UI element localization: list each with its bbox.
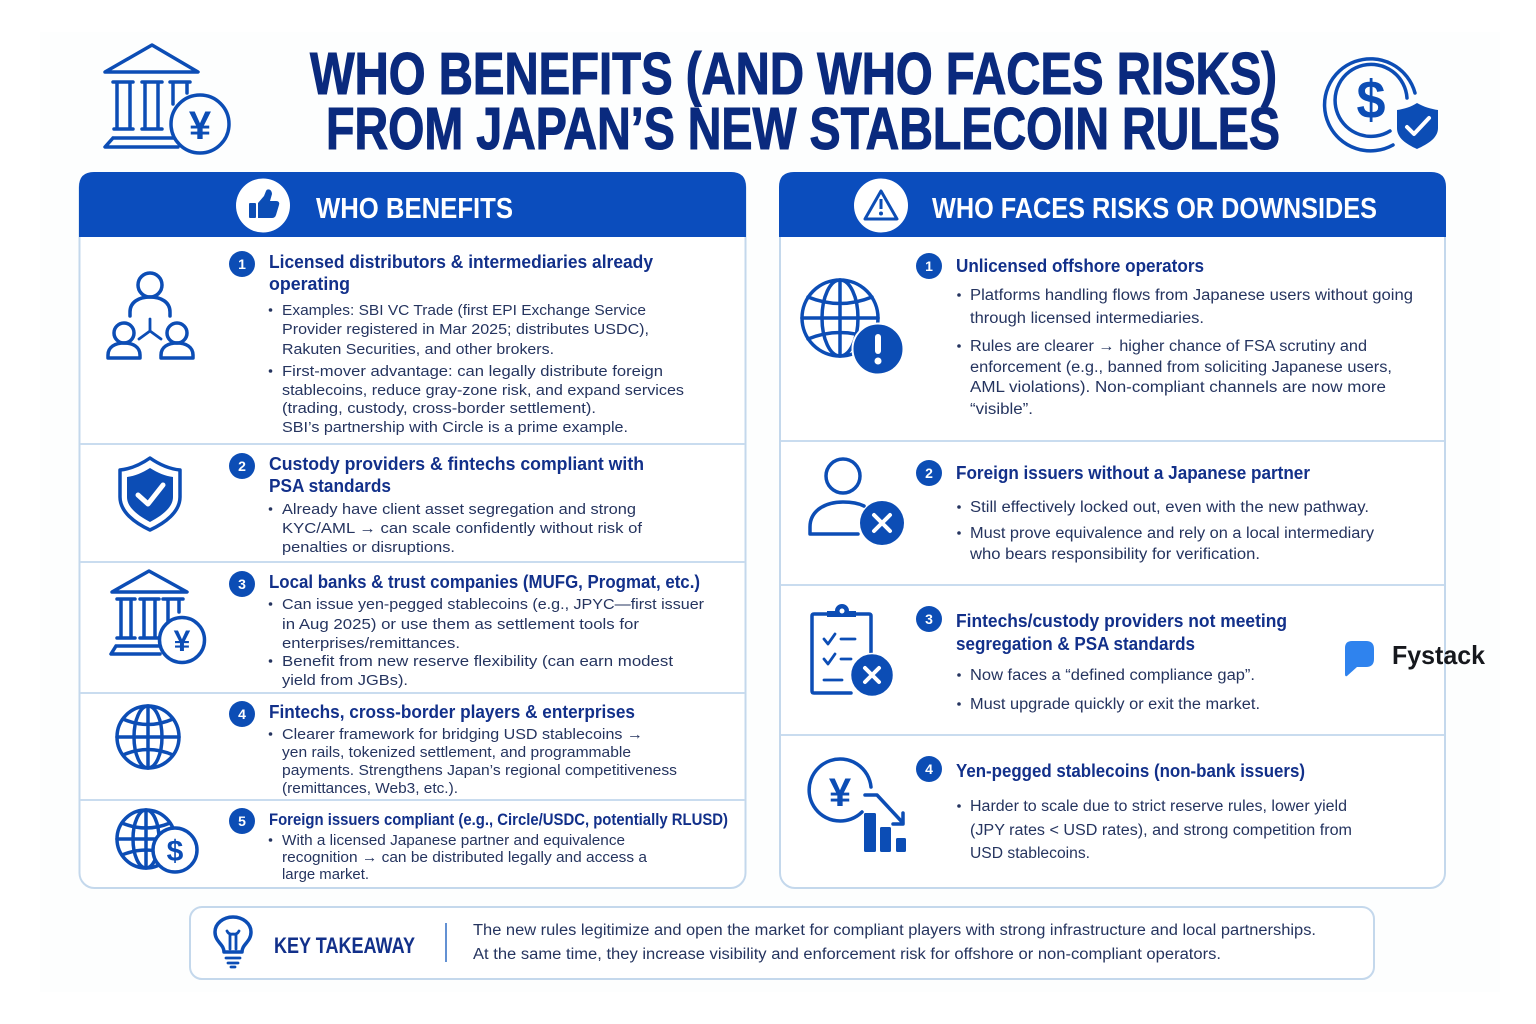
panel: who faces risks or downsides: [779, 172, 1446, 888]
icon: dollar coin with shield: $: [1356, 70, 1386, 130]
title: [310, 41, 1280, 162]
item body text: yield from JGBs).: [282, 672, 408, 689]
item 2: custody providers: [120, 453, 644, 556]
item body text: yen rails, tokenized settlement, and programmable: [282, 744, 631, 761]
item heading: [269, 252, 653, 294]
icon: thumbs up: [236, 178, 290, 232]
item heading: [956, 611, 1287, 654]
item 3: fintechs not meeting standards: [812, 604, 1287, 713]
item body text: [269, 832, 648, 883]
number badge 4: [916, 756, 942, 782]
item body text: large market.: [282, 866, 369, 883]
item 1: licensed distributors: [108, 251, 684, 436]
number badge 5: 5: [238, 813, 246, 829]
callout text: At the same time, they increase visibility and enforcement risk for offshore or non-compliant operators.: [473, 946, 1221, 963]
item body text: (JPY rates < USD rates), and strong competition from: [970, 822, 1352, 839]
item body text: [269, 726, 677, 797]
item body text: [269, 596, 704, 689]
item heading: Yen-pegged stablecoins (non-bank issuers): [956, 761, 1305, 781]
item body text: Provider registered in Mar 2025; distributes USDC),: [282, 321, 649, 338]
item body text: stablecoins, reduce gray-zone risk, and expand services: [282, 382, 684, 399]
item heading: Custody providers & fintechs compliant with: [269, 454, 644, 474]
title: WHO BENEFITS (AND WHO FACES RISKS): [310, 41, 1277, 107]
item body text: USD stablecoins.: [970, 845, 1090, 862]
callout text: [473, 922, 1316, 963]
icon: shield check: [120, 458, 180, 530]
panel heading: WHO BENEFITS: [316, 193, 513, 225]
item body text: With a licensed Japanese partner and equivalence: [282, 832, 625, 849]
item body text: [957, 499, 1374, 563]
item body text: Now faces a “defined compliance gap”.: [970, 667, 1255, 684]
item heading: Foreign issuers compliant (e.g., Circle/USDC, potentially RLUSD): [269, 810, 728, 829]
item heading: Unlicensed offshore operators: [956, 256, 1204, 276]
item body text: (trading, custody, cross-border settlement).: [282, 400, 596, 417]
icon: globe with dollar coin: [117, 810, 197, 872]
item body text: Platforms handling flows from Japanese users without going: [970, 287, 1413, 304]
icon: speech bubble: [1345, 641, 1374, 676]
item body text: (remittances, Web3, etc.).: [282, 780, 458, 797]
item body text: Rakuten Securities, and other brokers.: [282, 341, 554, 358]
brand logo: Fystack: [1345, 640, 1486, 676]
item heading: Local banks & trust companies (MUFG, Progmat, etc.): [269, 572, 700, 592]
icon: person with x: [810, 459, 904, 545]
title: FROM JAPAN’S NEW STABLECOIN RULES: [326, 96, 1280, 162]
number badge 1: 1: [925, 258, 933, 274]
item body text: Already have client asset segregation and strong: [282, 501, 636, 518]
icon: globe with dollar coin: $: [167, 835, 184, 868]
number badge 3: 3: [925, 611, 933, 627]
item heading: segregation & PSA standards: [956, 634, 1195, 654]
icon: light bulb: [215, 917, 251, 967]
item body text: Rules are clearer → higher chance of FSA scrutiny and: [970, 338, 1367, 355]
panel: who benefits: [79, 172, 746, 888]
item body text: [269, 501, 643, 556]
number badge 2: 2: [238, 458, 246, 474]
item heading: Licensed distributors & intermediaries already: [269, 252, 653, 272]
panel header bar: [779, 172, 1446, 237]
item body text: enforcement (e.g., banned from soliciting Japanese users,: [970, 359, 1392, 376]
item heading: Fintechs, cross-border players & enterprises: [269, 702, 635, 722]
item body text: [957, 798, 1352, 862]
item 4: fintechs: [117, 701, 677, 797]
item 1: unlicensed offshore operators: [802, 253, 1413, 418]
item body text: “visible”.: [970, 401, 1033, 418]
icon: clipboard with x: [812, 604, 894, 696]
panel heading: WHO FACES RISKS OR DOWNSIDES: [932, 193, 1377, 225]
callout text: The new rules legitimize and open the market for compliant players with strong infrastructure and local partnerships.: [473, 922, 1316, 939]
number badge 2: [229, 453, 255, 479]
item body text: Examples: SBI VC Trade (first EPI Exchange Service: [282, 302, 646, 319]
item body text: Must prove equivalence and rely on a local intermediary: [970, 525, 1374, 542]
item body text: Harder to scale due to strict reserve rules, lower yield: [970, 798, 1347, 815]
number badge 4: 4: [238, 706, 246, 722]
number badge 4: 4: [925, 761, 933, 777]
brand name: Fystack: [1392, 640, 1486, 670]
number badge 5: [229, 808, 255, 834]
item body text: penalties or disruptions.: [282, 539, 455, 556]
callout: key takeaway: [190, 907, 1374, 979]
item 3: local banks: [111, 571, 704, 689]
item body text: through licensed intermediaries.: [970, 310, 1204, 327]
item body text: Still effectively locked out, even with the new pathway.: [970, 499, 1369, 516]
icon: globe: [117, 706, 179, 768]
item body text: Must upgrade quickly or exit the market.: [970, 696, 1260, 713]
item body text: [957, 667, 1260, 713]
callout label: KEY TAKEAWAY: [274, 933, 415, 958]
item heading: Fintechs/custody providers not meeting: [956, 611, 1287, 631]
item heading: [269, 454, 644, 496]
panel frame: [780, 173, 1445, 888]
icon: yen coin with falling chart: [809, 759, 906, 852]
item body text: Can issue yen-pegged stablecoins (e.g., JPYC—first issuer: [282, 596, 704, 613]
number badge 2: 2: [925, 465, 933, 481]
number badge 1: 1: [238, 256, 246, 272]
number badge 4: [229, 701, 255, 727]
item body text: [269, 302, 684, 436]
item 4: yen-pegged stablecoins: [809, 756, 1352, 862]
icon: bank with yen coin: ¥: [174, 625, 191, 658]
item 2: foreign issuers without partner: [810, 459, 1374, 563]
icon: bank with yen coin: [111, 571, 204, 662]
number badge 3: [916, 606, 942, 632]
item body text: who bears responsibility for verification.: [969, 546, 1260, 563]
item 5: foreign issuers: [117, 808, 728, 883]
item body text: First-mover advantage: can legally distribute foreign: [282, 363, 663, 380]
item heading: Foreign issuers without a Japanese partner: [956, 463, 1310, 483]
number badge 3: [229, 571, 255, 597]
item body text: enterprises/remittances.: [282, 635, 460, 652]
number badge 1: [229, 251, 255, 277]
number badge 2: [916, 460, 942, 486]
item body text: KYC/AML → can scale confidently without risk of: [282, 520, 643, 537]
panel header bar: [79, 172, 746, 237]
item body text: Clearer framework for bridging USD stablecoins →: [282, 726, 643, 743]
item body text: recognition → can be distributed legally and access a: [282, 849, 648, 866]
icon: yen coin with falling chart: ¥: [829, 771, 852, 815]
icon: bank with yen coin: ¥: [189, 104, 212, 148]
item body text: payments. Strengthens Japan’s regional competitiveness: [282, 762, 677, 779]
number badge 1: [916, 253, 942, 279]
icon: warning triangle: [854, 178, 908, 232]
panel frame: [80, 173, 746, 888]
icon: dollar coin with shield: [1325, 59, 1438, 151]
item body text: AML violations). Non-compliant channels are now more: [970, 379, 1386, 396]
item body text: in Aug 2025) or use them as settlement tools for: [282, 616, 639, 633]
icon: bank with yen coin: [105, 45, 229, 153]
item body text: [957, 287, 1413, 418]
icon: globe with alert: [802, 280, 904, 374]
icon: people network: [108, 273, 193, 358]
item body text: SBI’s partnership with Circle is a prime example.: [282, 419, 628, 436]
callout frame: [190, 907, 1374, 979]
item body text: Benefit from new reserve flexibility (can earn modest: [282, 653, 674, 670]
item heading: operating: [269, 274, 350, 294]
number badge 3: 3: [238, 576, 246, 592]
item heading: PSA standards: [269, 476, 391, 496]
